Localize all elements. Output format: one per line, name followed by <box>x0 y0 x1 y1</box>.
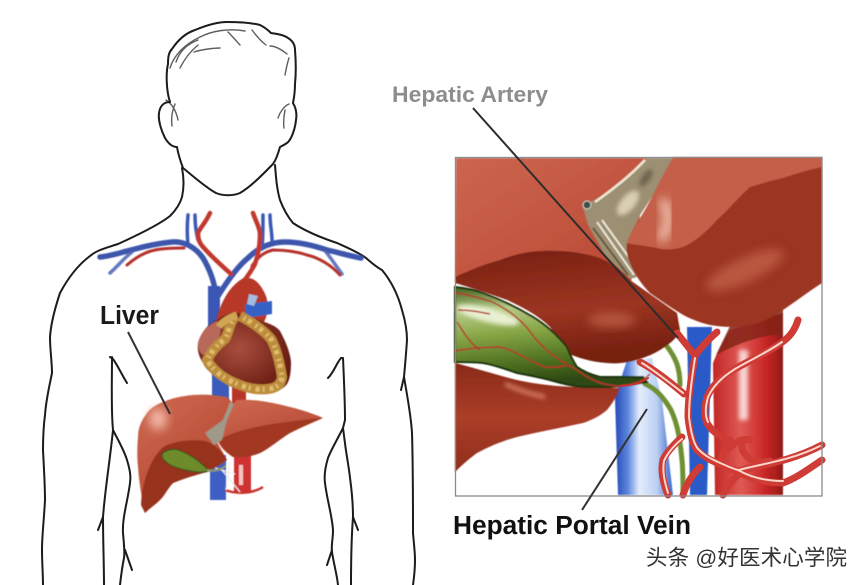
cystic artery <box>620 378 648 386</box>
artery base strokes <box>640 320 822 495</box>
liver leader line <box>128 332 170 414</box>
zoomed panel <box>455 157 822 496</box>
aorta highlight <box>739 350 748 420</box>
descending aorta <box>232 380 246 405</box>
liver label: Liver <box>100 302 159 330</box>
gallbladder <box>455 287 647 387</box>
left torso and arm lines <box>98 357 132 585</box>
fat band upper left <box>219 315 237 327</box>
head outline <box>159 22 296 195</box>
great vessels <box>100 213 361 406</box>
coronary fat band <box>207 316 282 389</box>
pulmonary vessel <box>245 301 272 318</box>
portal vein leader line <box>582 409 647 510</box>
left lobe <box>137 395 232 513</box>
left lobe underside <box>141 440 227 513</box>
artery branch <box>225 487 263 493</box>
ligament <box>205 402 234 445</box>
lower lobe highlight <box>505 384 545 397</box>
vessel end dot <box>583 201 591 209</box>
upper left lobe <box>455 158 660 290</box>
watermark: 头条 @好医术心学院 <box>646 546 847 570</box>
lower vessels under liver <box>210 455 263 500</box>
aorta <box>713 313 783 495</box>
right lobe <box>627 157 822 327</box>
gallbladder veins <box>455 293 650 386</box>
vessel highlight <box>247 294 258 306</box>
right branch vein <box>326 252 342 274</box>
small liver <box>137 395 323 513</box>
green bile ducts <box>645 345 683 490</box>
vena cava below liver <box>210 455 226 500</box>
fat band mottling <box>207 316 282 389</box>
right carotid artery <box>242 213 260 284</box>
atrium <box>198 321 221 355</box>
left branch vein <box>110 252 132 273</box>
hair strokes <box>166 30 289 128</box>
middle lobe highlight <box>588 313 636 327</box>
lower left lobe <box>455 363 620 472</box>
aorta highlight <box>239 465 243 485</box>
aorta below liver <box>234 455 251 493</box>
inferior vena cava <box>212 368 229 406</box>
hepatic arteries <box>620 320 822 495</box>
right lobe highlight <box>660 200 668 240</box>
ligament pale patch <box>613 187 643 219</box>
jugular veins <box>187 215 272 248</box>
left subclavian vein <box>100 242 216 295</box>
hepatic artery leader line <box>473 108 678 338</box>
liver highlight <box>149 408 167 430</box>
gallbladder highlight <box>455 300 521 330</box>
bile duct <box>207 466 226 471</box>
right lobe underside <box>219 418 323 457</box>
left subclavian artery <box>127 248 184 265</box>
portal vein <box>615 358 673 495</box>
lower highlight <box>702 241 788 299</box>
ligament dark patch <box>637 168 655 188</box>
panel background <box>456 158 822 496</box>
upper hepatic vein segment <box>687 327 712 495</box>
stripe shade <box>593 228 628 275</box>
body outline <box>42 22 415 585</box>
right subclavian vein <box>218 242 361 296</box>
small gallbladder <box>162 449 209 472</box>
right torso and arm lines <box>325 358 404 585</box>
hepatic portal vein label: Hepatic Portal Vein <box>453 512 691 540</box>
aortic arch <box>216 278 268 326</box>
aorta top shade <box>716 308 783 355</box>
ligament highlights <box>595 160 645 202</box>
neck and shoulders <box>42 168 184 585</box>
right subclavian artery <box>252 250 340 275</box>
hepatic artery label: Hepatic Artery <box>392 82 549 107</box>
heart body <box>198 313 291 393</box>
small branches <box>215 462 240 492</box>
round ligament stripes <box>597 220 638 275</box>
superior vena cava <box>208 286 220 345</box>
right lobe top surface <box>627 157 822 249</box>
ligament <box>583 158 673 279</box>
panel border <box>456 158 822 496</box>
right lobe <box>217 400 323 457</box>
artery highlights <box>642 342 820 493</box>
middle dark lobe <box>455 251 680 363</box>
heart <box>198 278 291 393</box>
left carotid artery <box>198 213 231 274</box>
